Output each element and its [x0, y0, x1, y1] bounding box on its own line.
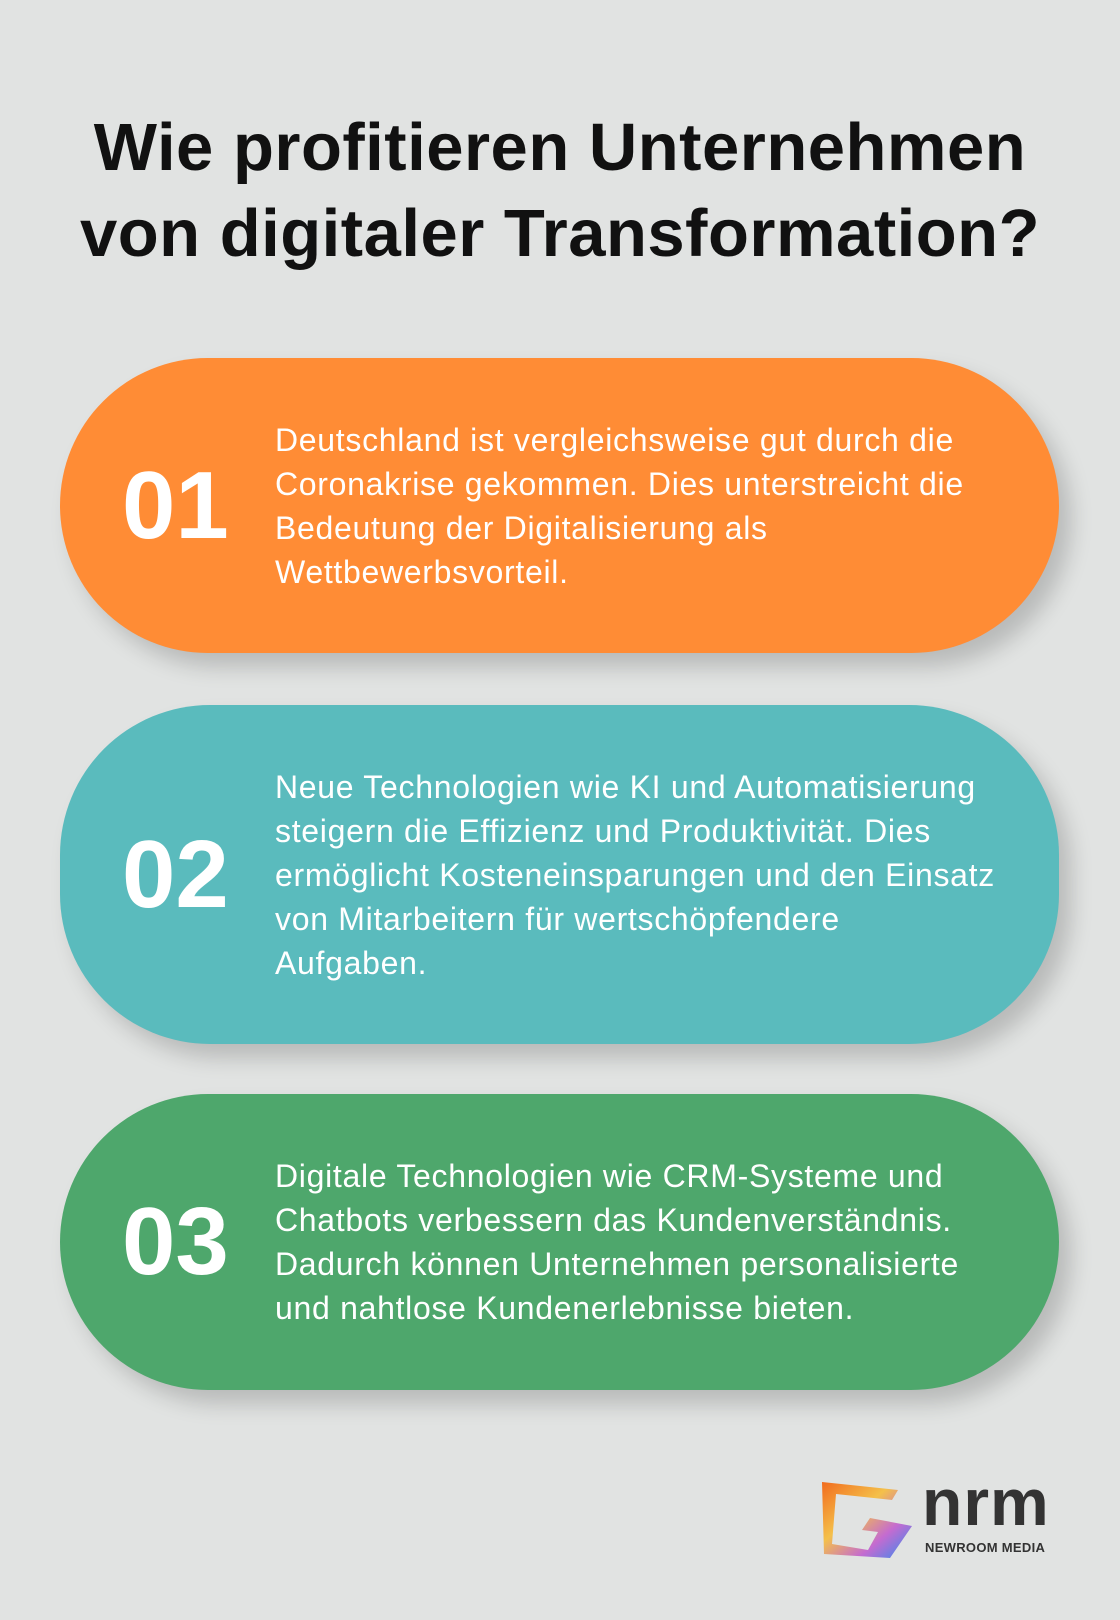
- text 02: von Mitarbeitern für wertschöpfendere: [275, 900, 840, 936]
- title: von digitaler Transformation?: [80, 196, 1040, 271]
- number 01: 01: [122, 452, 229, 558]
- text: NEWROOM MEDIA: NEWROOM MEDIA: [925, 1540, 1045, 1555]
- text 03: Digitale Technologien wie CRM-Systeme und: [275, 1158, 943, 1194]
- number 03: 03: [122, 1188, 229, 1295]
- text 03: und nahtlose Kundenerlebnisse bieten.: [275, 1290, 854, 1326]
- text 01: Coronakrise gekommen. Dies unterstreicht die: [275, 466, 964, 502]
- logo: [822, 1465, 1050, 1558]
- text 02: Aufgaben.: [275, 944, 427, 980]
- text 02: Neue Technologien wie KI und Automatisierung: [275, 768, 976, 804]
- text 02: steigern die Effizienz und Produktivität. Dies: [275, 812, 931, 848]
- text 01: Deutschland ist vergleichsweise gut durch die: [275, 422, 954, 458]
- text 01: [275, 422, 964, 590]
- panel: 02: [60, 705, 1059, 1044]
- text 02: ermöglicht Kosteneinsparungen und den Einsatz: [275, 856, 995, 892]
- panel: 03: [60, 1094, 1059, 1390]
- text 01: Bedeutung der Digitalisierung als: [275, 510, 768, 546]
- text 03: Dadurch können Unternehmen personalisierte: [275, 1246, 959, 1282]
- panel: 01: [60, 358, 1059, 653]
- text 03: Chatbots verbessern das Kundenverständnis.: [275, 1202, 952, 1238]
- title: [80, 110, 1040, 271]
- text 02: [275, 768, 995, 980]
- title: Wie profitieren Unternehmen: [94, 110, 1026, 185]
- text: nrm: nrm: [922, 1465, 1050, 1539]
- text 01: Wettbewerbsvorteil.: [275, 554, 569, 590]
- number 02: 02: [122, 820, 229, 928]
- text 03: [275, 1158, 959, 1326]
- icon: logo mark: [822, 1482, 912, 1558]
